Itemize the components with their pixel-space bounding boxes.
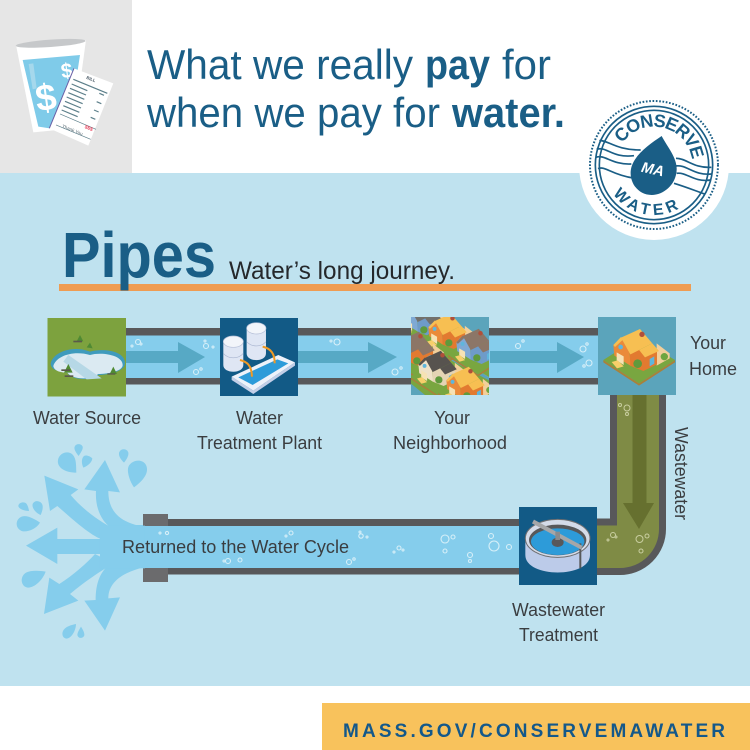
label: Returned to the Water Cycle: Returned to the Water Cycle bbox=[122, 537, 349, 557]
panel: diagram background bbox=[0, 173, 750, 686]
header background bbox=[0, 0, 750, 173]
bubbles: wastewater bbox=[607, 404, 649, 553]
arrow: source to plant bbox=[126, 342, 205, 373]
label: Wastewater Treatment: Wastewater bbox=[512, 600, 605, 620]
icon: wastewater treatment bbox=[519, 507, 597, 585]
arrow: up bbox=[84, 460, 143, 528]
label: Water Source: Water Source bbox=[33, 408, 141, 428]
badge: Conserve MA Water: CONSERVE bbox=[615, 114, 704, 159]
label: Wastewater Treatment bbox=[512, 600, 605, 645]
heading: Pipes: Pipes bbox=[62, 219, 216, 291]
label: Your Home: Home bbox=[689, 359, 737, 379]
badge: Conserve MA Water bbox=[580, 100, 728, 240]
bubbles: bottom pipe bbox=[159, 531, 512, 564]
arrow: neighborhood to home bbox=[490, 342, 584, 373]
bubbles: top pipe bbox=[131, 339, 592, 375]
label: Water Treatment Plant: Water bbox=[236, 408, 283, 428]
icon panel: glass and bill: $$$ bbox=[84, 124, 94, 133]
arrow: upper left bbox=[44, 476, 113, 539]
bottom pipe bbox=[120, 514, 520, 582]
label: Wastewater vertical: Wastewater bbox=[671, 427, 691, 520]
top pipe with water and arrows bbox=[126, 328, 600, 384]
label: Your Home: Your bbox=[690, 333, 726, 353]
heading: Pipes: Water’s long journey. bbox=[229, 257, 455, 285]
label: Your Neighborhood bbox=[393, 408, 507, 453]
label: Wastewater Treatment: Treatment bbox=[519, 625, 598, 645]
label: Your Neighborhood: Your bbox=[434, 408, 470, 428]
label: Your Neighborhood: Neighborhood bbox=[393, 433, 507, 453]
icon panel: glass and bill: Thank You bbox=[61, 124, 84, 137]
heading: Pipes bbox=[59, 219, 691, 291]
title bbox=[146, 41, 565, 136]
footer banner: MASS.GOV/CONSERVEMAWATER bbox=[343, 721, 725, 742]
badge: Conserve MA Water: MA bbox=[640, 160, 665, 180]
icon panel: glass and bill bbox=[0, 0, 132, 173]
footer banner bbox=[322, 703, 750, 750]
icon: neighborhood bbox=[411, 317, 489, 395]
icon panel: glass and bill: BILL bbox=[86, 75, 97, 83]
label: Water Treatment Plant bbox=[197, 408, 322, 453]
arrow: plant to neighborhood bbox=[298, 342, 397, 373]
arrow: lower left bbox=[44, 554, 113, 614]
pipe flanges bbox=[143, 514, 168, 582]
badge: Conserve MA Water: WATER bbox=[614, 186, 679, 216]
arrow: down bbox=[84, 562, 143, 631]
title: pay bbox=[425, 41, 491, 88]
icon panel: glass and bill: $ bbox=[59, 59, 75, 83]
icon: water source bbox=[48, 318, 126, 396]
drops bbox=[58, 452, 76, 473]
icon: your home bbox=[598, 317, 676, 395]
icon panel: glass and bill: $ bbox=[33, 75, 59, 120]
release arrows and drops bbox=[17, 444, 147, 639]
title: water. bbox=[451, 89, 565, 136]
label: Your Home bbox=[689, 333, 737, 379]
title: when we pay for bbox=[146, 89, 440, 136]
wastewater pipe bbox=[597, 395, 662, 572]
icon: water treatment plant bbox=[220, 318, 298, 396]
title: What we really bbox=[147, 41, 413, 88]
title: for bbox=[502, 41, 551, 88]
arrow: left bbox=[26, 528, 107, 564]
label: Water Treatment Plant: Treatment Plant bbox=[197, 433, 322, 453]
